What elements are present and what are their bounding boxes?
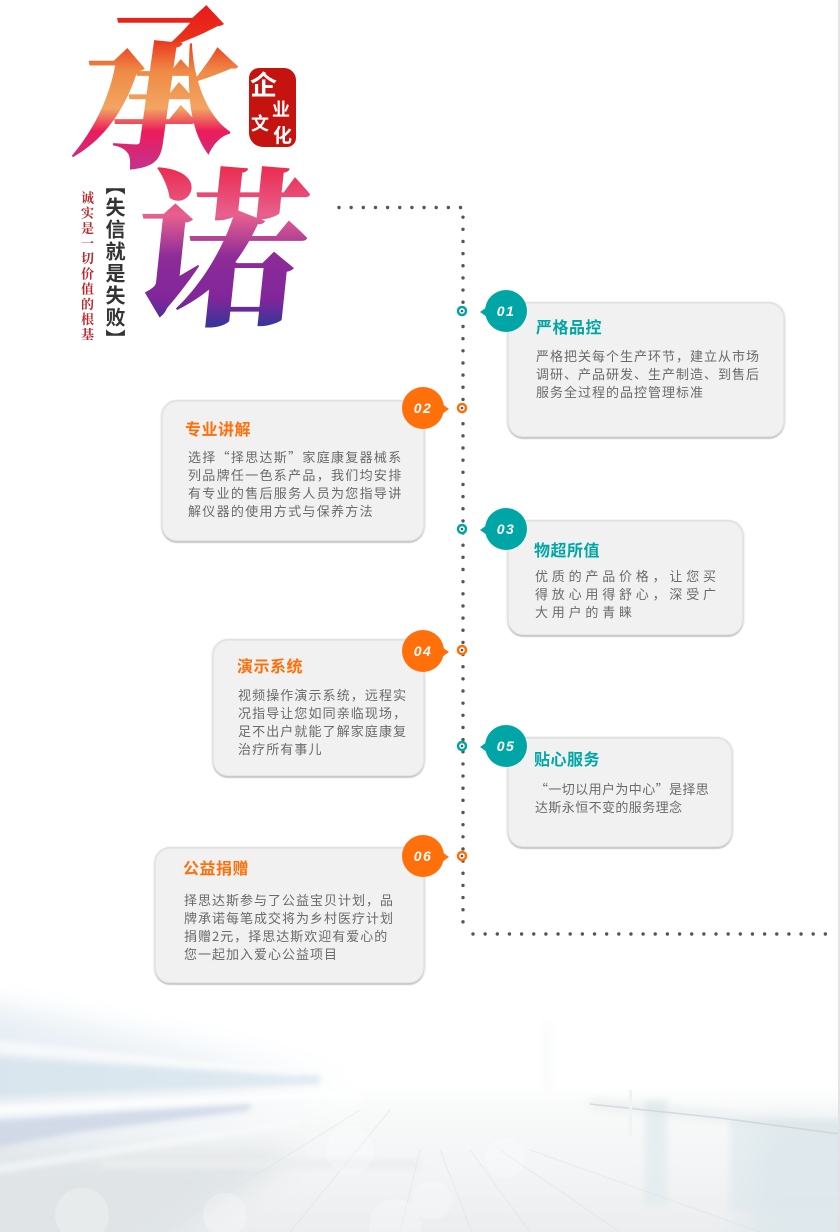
bokeh light circles bbox=[55, 1126, 525, 1232]
badge 06 bbox=[402, 835, 449, 877]
text: 牌承诺每笔成交将为乡村医疗计划 bbox=[184, 908, 394, 927]
text: 严格把关每个生产环节，建立从市场 bbox=[536, 346, 760, 365]
heading: 专业讲解 bbox=[185, 416, 251, 440]
text: 况指导让您如同亲临现场， bbox=[238, 703, 407, 722]
text: 调研、产品研发、生产制造、到售后 bbox=[536, 364, 760, 383]
badge 05 bbox=[480, 725, 527, 767]
badge 01: 01 bbox=[497, 303, 515, 319]
seal: 企业文化: 文 bbox=[251, 110, 269, 136]
text bbox=[535, 566, 720, 621]
text: 足不出户就能了解家庭康复 bbox=[238, 721, 407, 740]
heading: 物超所值 bbox=[534, 537, 600, 561]
text: 得放心用得舒心，深受广 bbox=[535, 584, 720, 603]
badge 02 bbox=[402, 387, 449, 429]
panel: 05 贴心服务 bbox=[508, 738, 732, 847]
text: 选择“择思达斯”家庭康复器械系 bbox=[188, 447, 403, 466]
heading: 演示系统 bbox=[237, 653, 303, 677]
text: 服务全过程的品控管理标准 bbox=[536, 382, 704, 401]
panel: 01 严格品控 bbox=[508, 303, 784, 437]
seal: 企业文化 bbox=[249, 68, 296, 147]
vertical slogan: 【失信就是失败】 bbox=[101, 175, 130, 351]
panel: 06 公益捐赠 bbox=[155, 848, 424, 983]
panel: 03 物超所值 bbox=[508, 521, 743, 635]
text bbox=[535, 779, 709, 816]
perspective floor lines bbox=[165, 1110, 760, 1232]
text: 解仪器的使用方式与保养方法 bbox=[188, 501, 374, 520]
text: 列品牌任一色系产品，我们均安排 bbox=[188, 465, 403, 484]
timeline nodes bbox=[458, 307, 466, 860]
calligraphy title: 承诺: 诺 bbox=[124, 114, 322, 361]
text bbox=[536, 346, 760, 401]
badge 04: 04 bbox=[414, 643, 432, 659]
heading: 严格品控 bbox=[536, 314, 602, 338]
badge 03 bbox=[480, 508, 527, 550]
seal: 企业文化: 化 bbox=[273, 121, 292, 148]
text: 大用户的青睐 bbox=[535, 602, 636, 621]
seal: 企业文化: 业 bbox=[272, 96, 290, 122]
badge 03: 03 bbox=[497, 521, 515, 537]
text: 有专业的售后服务人员为您指导讲 bbox=[188, 483, 403, 502]
badge 04 bbox=[402, 630, 449, 672]
text bbox=[188, 447, 403, 520]
text: 视频操作演示系统，远程实 bbox=[238, 685, 407, 704]
badge 02: 02 bbox=[414, 400, 432, 416]
text: 达斯永恒不变的服务理念 bbox=[535, 797, 682, 816]
badge 06: 06 bbox=[414, 848, 432, 864]
badge 05: 05 bbox=[497, 738, 515, 754]
text: 优质的产品价格，让您买 bbox=[535, 566, 720, 585]
seal: 企业文化: 企 bbox=[250, 64, 277, 103]
heading: 贴心服务 bbox=[534, 746, 600, 770]
text bbox=[238, 685, 407, 758]
text: 您一起加入爱心公益项目 bbox=[184, 944, 338, 963]
panel: 02 专业讲解 bbox=[162, 401, 424, 541]
badge 01 bbox=[480, 290, 527, 332]
text: 捐赠2元，择思达斯欢迎有爱心的 bbox=[184, 926, 388, 945]
text: 治疗所有事儿 bbox=[238, 739, 323, 758]
text: 择思达斯参与了公益宝贝计划，品 bbox=[184, 890, 394, 909]
text: “一切以用户为中心”是择思 bbox=[535, 779, 709, 798]
text bbox=[184, 890, 394, 963]
vertical red tagline: 诚实是一切价值的根基 bbox=[78, 191, 97, 343]
calligraphy title: 承诺 bbox=[63, 0, 322, 361]
panel: 04 演示系统 bbox=[213, 640, 424, 776]
heading: 公益捐赠 bbox=[183, 855, 249, 879]
